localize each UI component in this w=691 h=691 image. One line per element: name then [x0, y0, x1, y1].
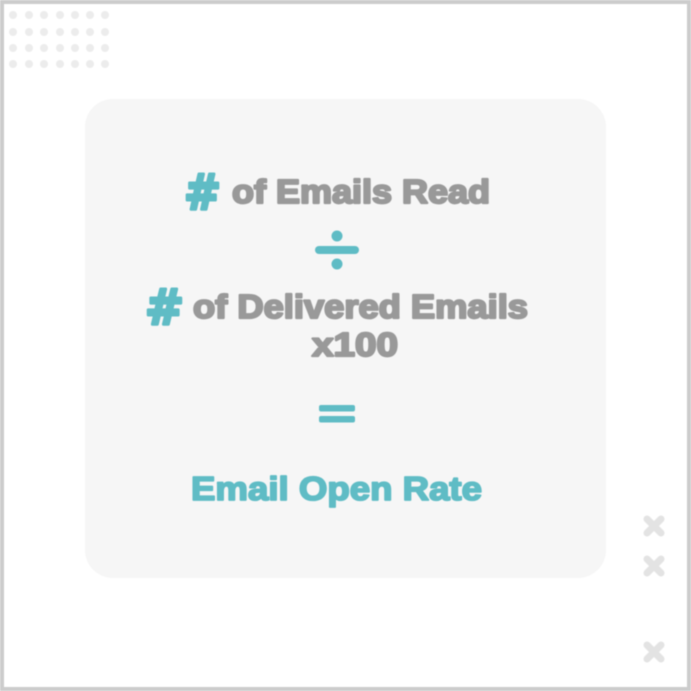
decorative dot grid [9, 11, 109, 68]
icon: equals sign [319, 405, 355, 422]
text: of Delivered Emails: of Delivered Emails [193, 288, 528, 325]
panel: formula card [85, 99, 606, 578]
text: of Emails Read: of Emails Read [232, 173, 490, 210]
formula line: emails read [184, 164, 490, 221]
text: x100: x100 [312, 326, 398, 363]
icon: hash symbol: # [145, 279, 184, 336]
decorative cross marks [647, 519, 661, 659]
icon: division sign [315, 230, 359, 270]
text: result Email Open Rate: Email Open Rate [191, 470, 482, 507]
icon: hash symbol: # [184, 164, 221, 221]
formula line: delivered emails [145, 279, 528, 336]
